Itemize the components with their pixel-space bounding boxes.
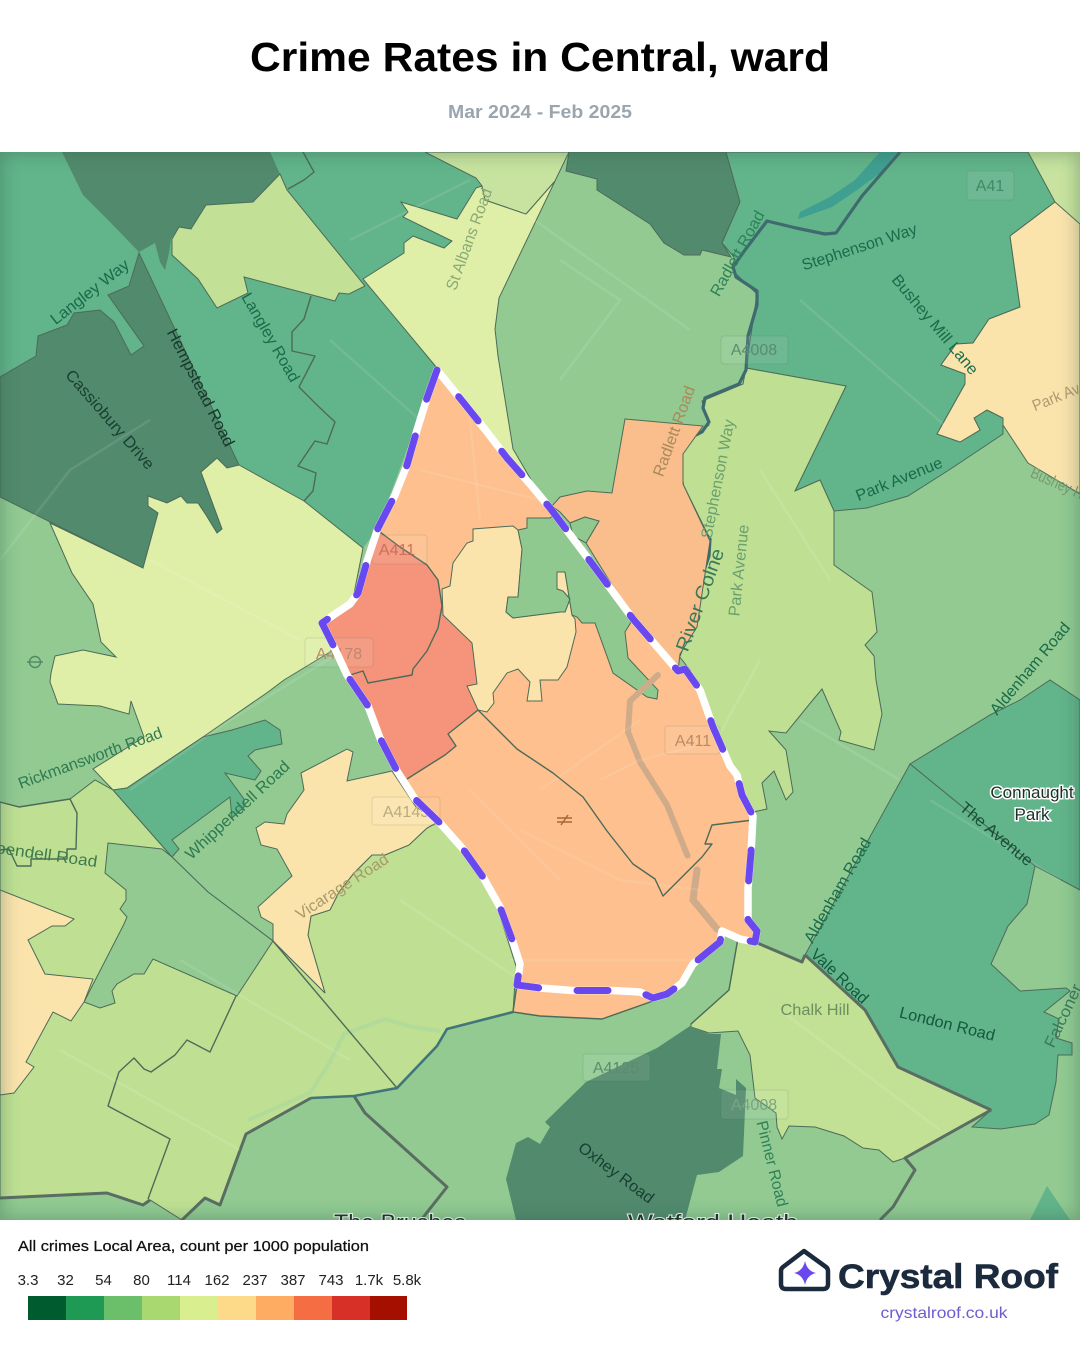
river teal stream	[798, 152, 897, 219]
north-central dark-green zone	[566, 152, 740, 257]
south-west tan zone	[0, 890, 93, 1095]
street labels: The Avenue	[956, 799, 1036, 870]
street labels: Pinner Road	[752, 1119, 790, 1209]
ward streets	[420, 420, 700, 960]
street labels: Stephenson Way	[800, 221, 919, 274]
ward internal lines	[350, 532, 753, 1019]
street labels: Langley Road	[238, 290, 302, 385]
ward green wedge	[570, 517, 599, 543]
Park Avenue light-green zone	[679, 368, 882, 812]
street labels: Connaught	[990, 783, 1074, 802]
road label: A4178	[305, 638, 373, 667]
street labels: Radlett Road	[651, 384, 699, 479]
legend title: All crimes Local Area, count per 1000 population	[18, 1239, 369, 1255]
Cassiobury dark-green zone	[0, 253, 239, 568]
top light zone	[425, 152, 569, 214]
logo wordmark: Crystal Roof	[838, 1258, 1059, 1296]
icon: rail station	[557, 815, 572, 825]
east orange area	[552, 419, 710, 671]
legend values: 5.8k	[393, 1272, 422, 1289]
pale streets overlay	[0, 180, 1060, 1150]
street labels: Langley Way	[48, 257, 133, 328]
street labels: Cassiobury Drive	[62, 367, 157, 473]
road label: A4125	[583, 1054, 650, 1081]
legend colour scale	[28, 1296, 407, 1320]
ward boundary lines, south-west	[0, 152, 991, 1220]
London Road mid-green zone	[805, 764, 1072, 1129]
road label: A4008 south	[721, 1090, 788, 1119]
legend values: 743	[318, 1272, 344, 1289]
street labels	[0, 186, 1080, 1235]
legend values: 80	[133, 1272, 150, 1289]
road label: A411 north	[372, 535, 427, 564]
legend values: 1.7k	[355, 1272, 384, 1289]
street labels: Chalk Hill	[780, 1002, 850, 1019]
street labels: The Brushes	[334, 1210, 466, 1235]
park pale zone west	[50, 458, 363, 790]
light-green north zone	[172, 174, 365, 308]
street labels: Bushey Mill Lane	[888, 272, 981, 379]
street labels: Park Avenue	[853, 455, 945, 505]
street labels: Park	[1015, 805, 1050, 824]
road label: A4145	[372, 797, 440, 825]
road label: A411 east: A411	[675, 733, 711, 750]
subtitle: date range: Mar 2024 - Feb 2025	[448, 102, 632, 122]
road label: A4125: A4125	[593, 1060, 639, 1077]
legend values: 162	[204, 1272, 230, 1289]
south-west mid-green patch	[84, 843, 273, 1008]
legend	[18, 1239, 422, 1320]
website url: crystalroof.co.uk	[880, 1305, 1009, 1322]
street labels: Oxhey Road	[575, 1140, 657, 1207]
road label: A4008 south: A4008	[731, 1097, 777, 1114]
road label: A411 north: A411	[379, 542, 415, 559]
north-east mid-green zone	[722, 152, 1055, 511]
street labels: Rickmansworth Road	[16, 725, 165, 793]
street labels: Hempstead Road	[163, 326, 237, 450]
title: Crime Rates in Central, ward	[250, 34, 830, 80]
north-west dark-green zone	[62, 152, 280, 270]
ward tan zone	[442, 526, 576, 712]
legend values: 54	[95, 1272, 112, 1289]
street labels: Whippendell Road	[182, 758, 293, 863]
ward green zone	[506, 513, 658, 699]
Oxhey dark-green zone	[506, 1026, 746, 1220]
icon: house with star	[781, 1251, 828, 1289]
street labels: Vicarage Road	[293, 851, 392, 923]
river Colne	[679, 152, 900, 656]
Whippendell mid-green zone	[113, 720, 282, 857]
street labels: Stephenson Way	[699, 418, 738, 540]
street labels: Watford Heath	[628, 1210, 798, 1235]
icon: underground station	[27, 656, 43, 668]
map edge fade	[0, 146, 1080, 1226]
legend values: 114	[167, 1272, 191, 1289]
Vicarage tan zone	[256, 749, 440, 993]
street labels: London Road	[897, 1005, 997, 1045]
legend values	[18, 1272, 422, 1289]
road label: A41: A41	[976, 178, 1004, 195]
road label: A4178: A4178	[316, 646, 362, 663]
street labels: Park Avenue	[726, 524, 753, 617]
top-right light zone	[1028, 152, 1080, 224]
legend values: 387	[280, 1272, 306, 1289]
north-east tan zone	[937, 202, 1080, 494]
street labels: Vale Road	[807, 946, 871, 1007]
road label: A411 east	[665, 726, 720, 754]
street labels: St Albans Road	[443, 186, 496, 293]
railway tracks	[628, 675, 717, 929]
Connaught Park mid-green zone	[910, 680, 1080, 890]
road label: A4008 north	[721, 336, 788, 364]
Chalk Hill light-green zone	[691, 938, 991, 1162]
ward fill: orange	[380, 378, 753, 1018]
north-west mid-green zone	[0, 152, 482, 568]
legend values: 3.3	[18, 1272, 38, 1289]
road label: A41	[967, 171, 1014, 200]
St Albans Road pale zone	[363, 181, 555, 512]
ward high-crime zones	[322, 532, 478, 779]
logo: Crystal Roof	[781, 1251, 1059, 1322]
legend values: 237	[242, 1272, 268, 1289]
ward boundary: white and purple dashed	[322, 370, 757, 998]
road label: A4008 north: A4008	[731, 342, 777, 359]
south-west light-green zone	[0, 780, 516, 1220]
street labels: Radlett Road	[708, 208, 769, 299]
street labels: River Colne	[672, 546, 729, 654]
south-east small mid-green zone	[1030, 1186, 1070, 1220]
street labels: Aldenham Road	[801, 835, 875, 946]
stream in south-west	[248, 1019, 440, 1120]
road label: A4145: A4145	[383, 804, 429, 821]
street labels: Aldenham Road	[987, 620, 1074, 719]
legend values: 32	[57, 1272, 74, 1289]
